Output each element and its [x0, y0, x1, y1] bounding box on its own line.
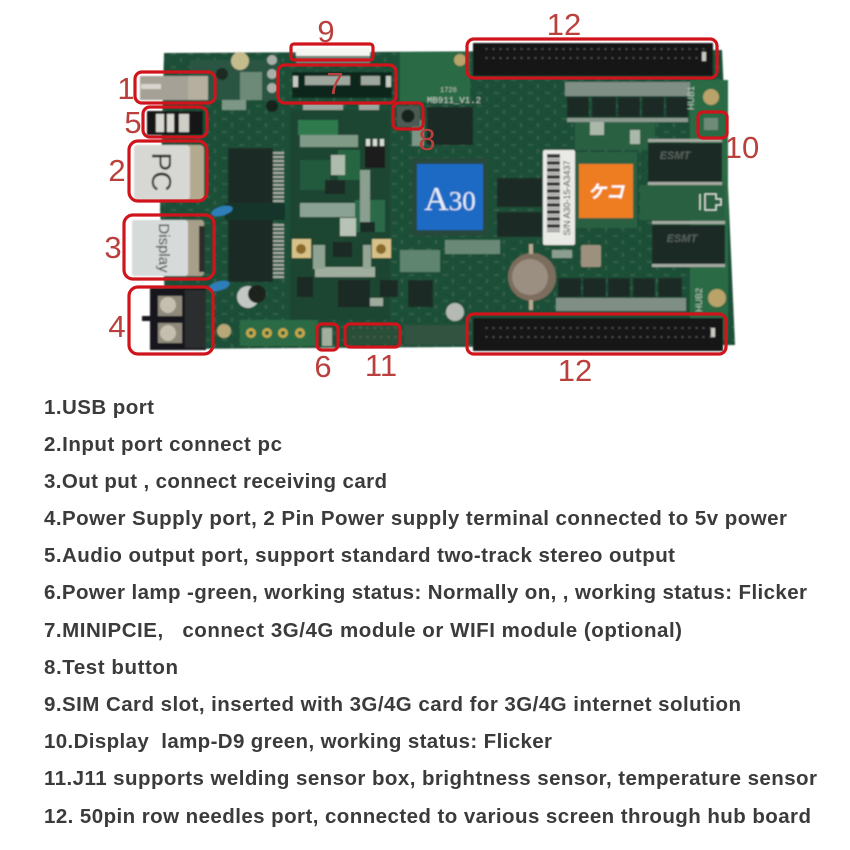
- PC port: PC: [146, 153, 177, 191]
- ESMT RAM chips: ESMT: [667, 233, 699, 245]
- SIM slot: [296, 48, 370, 63]
- audio port: [147, 111, 203, 135]
- callout numbers: 11: [365, 348, 397, 383]
- small central chips: [297, 139, 433, 307]
- network transformer chips: [225, 148, 285, 282]
- lower driver chip row: [556, 278, 686, 311]
- legend list: 10.Display lamp-D9 green, working status: Flicker: [44, 730, 552, 753]
- legend list: 11.J11 supports welding sensor box, brightness sensor, temperature sensor: [44, 767, 817, 790]
- gold mounting pads: [217, 52, 726, 341]
- ESMT RAM chips: [648, 139, 725, 267]
- legend list: [44, 396, 817, 828]
- PC port: [134, 145, 204, 200]
- callout numbers: 12: [558, 353, 592, 388]
- legend list: 4.Power Supply port, 2 Pin Power supply terminal connected to 5v power: [44, 507, 787, 530]
- display port: Display: [155, 223, 172, 273]
- legend list: 12. 50pin row needles port, connected to various screen through hub board: [44, 805, 811, 828]
- bottom 50-pin header: [473, 318, 723, 351]
- mini PCIe slot: [292, 72, 392, 110]
- callout numbers: 5: [124, 105, 142, 140]
- callout numbers: [104, 7, 759, 388]
- ESMT RAM chips: ESMT: [660, 150, 692, 162]
- callout numbers: 1: [117, 71, 135, 106]
- callout numbers: 3: [104, 230, 122, 265]
- coin battery: [508, 244, 556, 310]
- processor chip: MB911_V1.2: [427, 96, 481, 106]
- callout numbers: 10: [725, 130, 759, 165]
- board photo: [132, 43, 735, 351]
- HUB silkscreen: HUB1: [686, 86, 696, 110]
- callout numbers: 2: [108, 153, 126, 188]
- USB port: [140, 76, 208, 100]
- legend list: 3.Out put , connect receiving card: [44, 470, 387, 493]
- red highlight boxes: [124, 39, 727, 354]
- callout numbers: 4: [108, 309, 126, 344]
- callout numbers: 7: [326, 66, 344, 101]
- A30 logo chip: [412, 158, 488, 236]
- barcode label: [543, 150, 575, 245]
- processor chip: [427, 87, 481, 145]
- barcode label: S/N A30-15-A3437: [562, 160, 572, 236]
- upper driver chip row: [565, 82, 690, 122]
- legend list: 5.Audio output port, support standard two-track stereo output: [44, 544, 675, 567]
- callout numbers: 12: [547, 7, 581, 42]
- HUB silkscreen: HUB2: [694, 288, 704, 312]
- electrolytic capacitor: [237, 285, 464, 321]
- circuit board base: [160, 50, 735, 349]
- HUB silkscreen: [686, 86, 704, 312]
- processor chip: 1726: [440, 87, 457, 95]
- legend list: 1.USB port: [44, 396, 154, 419]
- callout numbers: 8: [418, 122, 436, 157]
- lighter board zones: [190, 52, 728, 346]
- crystal: [581, 245, 601, 267]
- display port: [132, 220, 205, 276]
- blue capacitors: [207, 204, 234, 293]
- power terminal: [142, 288, 206, 350]
- top 50-pin header: [473, 43, 713, 76]
- callout numbers: 9: [317, 14, 335, 49]
- legend list: 6.Power lamp -green, working status: Normally on, , working status: Flicker: [44, 581, 807, 604]
- header 11 pins: [322, 325, 466, 346]
- legend list: 7.MINIPCIE, connect 3G/4G module or WIFI module (optional): [44, 619, 682, 642]
- callout numbers: 6: [314, 349, 332, 384]
- A30 logo chip: A30: [424, 181, 476, 218]
- memory chips: [497, 178, 542, 237]
- orange logo chip: [575, 152, 637, 228]
- orange logo chip: ケコ: [588, 182, 625, 202]
- legend list: 9.SIM Card slot, inserted with 3G/4G card for 3G/4G internet solution: [44, 693, 741, 716]
- legend list: 8.Test button: [44, 656, 178, 679]
- silver capacitors: [216, 55, 278, 112]
- legend list: 2.Input port connect pc: [44, 433, 282, 456]
- test button: [397, 106, 420, 127]
- silkscreen marker: [700, 194, 721, 210]
- display lamp: [704, 118, 718, 130]
- silkscreen component clusters: [222, 72, 640, 306]
